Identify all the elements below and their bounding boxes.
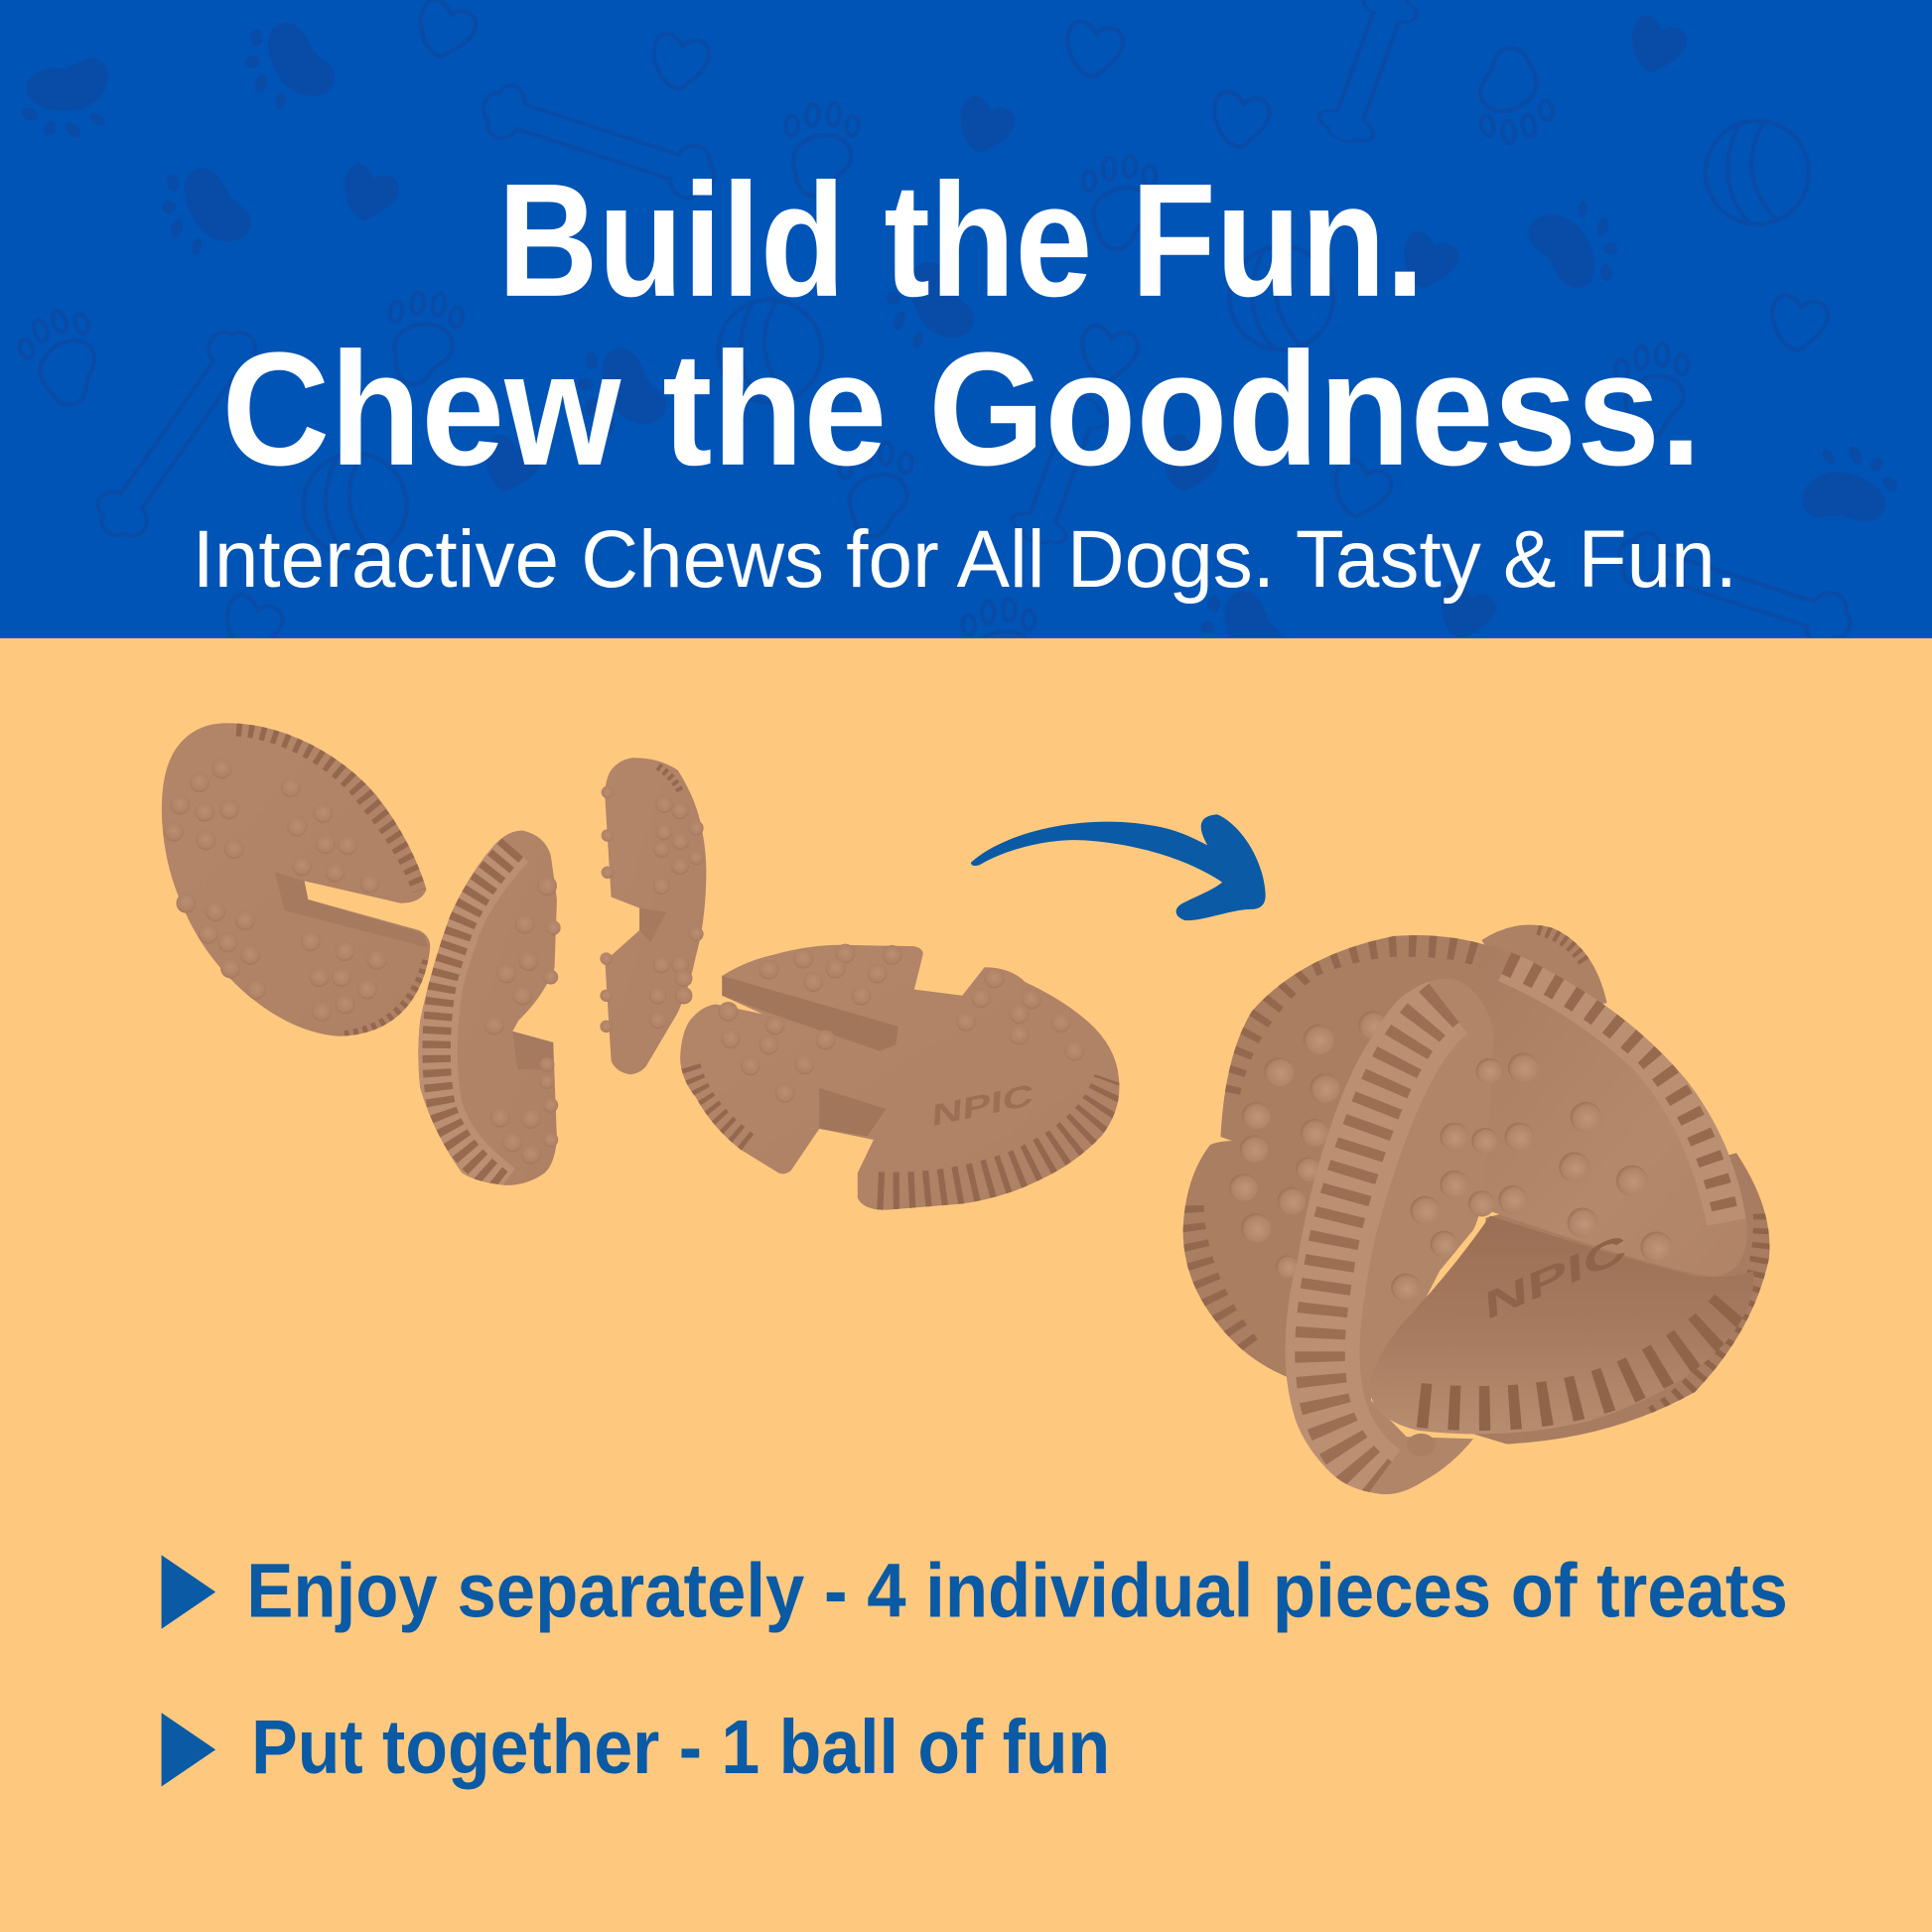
piece 3: narrow disc half [600, 758, 706, 1074]
icon: triangle marker 2 [162, 1713, 215, 1787]
title line 2: Chew the Goodness. [221, 320, 1702, 499]
ball: top left back piece [1221, 935, 1485, 1163]
bullet text 2: Put together - 1 ball of fun [251, 1705, 1110, 1790]
arrow from pieces to ball [971, 814, 1266, 920]
logo: NPIC on ball: NPIC [1483, 1225, 1627, 1328]
piece 4: flat disc with NPIC logo [680, 944, 1124, 1210]
piece 2: edge-on disc with ridges [418, 830, 561, 1185]
ball: small bump at bottom [1407, 1434, 1436, 1456]
assembled chew ball [1183, 925, 1769, 1494]
subtitle: Interactive Chews for All Dogs. Tasty & Fun. [193, 514, 1737, 605]
bullet 1 [162, 1548, 1788, 1633]
ball: right piece [1469, 946, 1747, 1277]
ball: lower right back piece [1469, 1153, 1769, 1445]
bullet text 1: Enjoy separately - 4 individual pieces of treats [246, 1548, 1788, 1633]
ball: bottom front piece [1369, 1216, 1753, 1434]
ball: back top piece [1481, 925, 1606, 1004]
panel: peach product background [0, 638, 1932, 1932]
ball: front vertical piece [1286, 979, 1502, 1494]
background pattern of paws, bones, hearts and balls [12, 0, 1909, 693]
bullet 2 [162, 1705, 1110, 1790]
title line 1: Build the Fun. [497, 151, 1425, 331]
logo: NPIC on piece: NPIC [931, 1078, 1035, 1133]
ball: left piece [1183, 1135, 1320, 1378]
piece 1: flat slotted disc [162, 723, 430, 1038]
panel: blue header background [0, 0, 1932, 640]
icon: triangle marker 1 [162, 1555, 215, 1629]
